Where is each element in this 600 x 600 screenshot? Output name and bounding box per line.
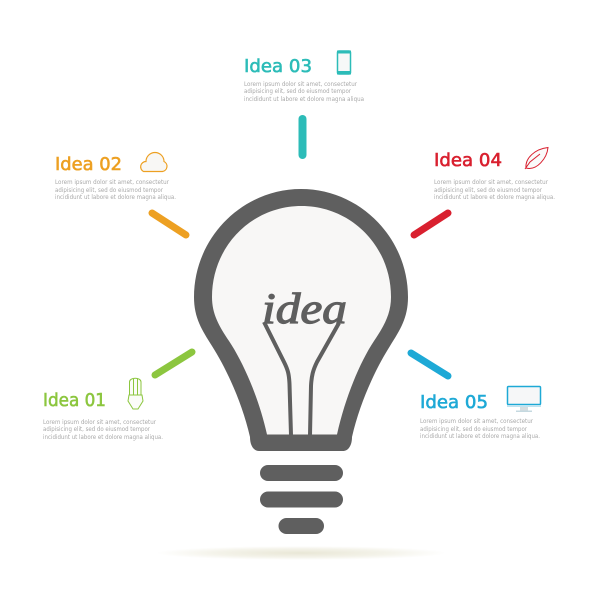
bulb glass outline <box>194 189 408 451</box>
ray: idea 05 <box>411 353 448 376</box>
heading: Idea 01 <box>43 390 106 411</box>
icon: light bulb <box>194 189 408 534</box>
icon: smartphone <box>337 50 351 74</box>
screw base bar 2 <box>260 492 343 508</box>
body text: adipisicing elit, sed do eiusmod tempor <box>43 426 150 433</box>
block: idea 03 <box>244 50 364 103</box>
body text: incididunt ut labore et dolore magna aliqua <box>244 96 364 103</box>
body text: adipisicing elit, sed do eiusmod tempor <box>55 187 163 194</box>
body text <box>244 81 364 103</box>
word: idea: idea <box>262 286 347 333</box>
body text <box>434 179 555 201</box>
bulb glass interior <box>212 206 391 434</box>
ray: idea 02 <box>152 213 186 235</box>
ground shadow <box>156 546 446 560</box>
icon: cloud <box>141 152 167 172</box>
screw base bar 3 <box>278 518 324 534</box>
body text: incididunt ut labore et dolore magna aliqua. <box>43 434 163 441</box>
body text <box>420 418 540 440</box>
body text <box>43 419 163 441</box>
body text: Lorem ipsum dolor sit amet, consectetur <box>434 179 548 186</box>
heading: Idea 04 <box>434 150 502 171</box>
block: idea 05 <box>420 386 541 440</box>
body text: Lorem ipsum dolor sit amet, consectetur <box>420 418 533 425</box>
ray: idea 01 <box>155 352 192 375</box>
body text: incididunt ut labore et dolore magna aliqua. <box>420 433 540 440</box>
heading: Idea 05 <box>420 392 488 413</box>
icon: cfl bulb <box>128 378 143 409</box>
body text: adipisicing elit, sed do eiusmod tempor <box>434 187 542 194</box>
body text: Lorem ipsum dolor sit amet, consectetur <box>55 179 169 186</box>
filament <box>264 322 339 435</box>
body text: incididunt ut labore et dolore magna aliqua. <box>434 194 555 201</box>
block: idea 02 <box>55 152 176 201</box>
body text: Lorem ipsum dolor sit amet, consectetur <box>244 81 357 88</box>
heading: Idea 03 <box>244 56 312 77</box>
ray: idea 03 <box>298 119 306 155</box>
body text: adipisicing elit, sed do eiusmod tempor <box>244 88 351 95</box>
icon: monitor <box>507 386 541 412</box>
block: idea 01 <box>43 378 163 441</box>
body text: adipisicing elit, sed do eiusmod tempor <box>420 426 527 433</box>
heading: Idea 02 <box>55 154 122 175</box>
body text: incididunt ut labore et dolore magna aliqua. <box>55 194 176 201</box>
body text: Lorem ipsum dolor sit amet, consectetur <box>43 419 156 426</box>
body text <box>55 179 176 201</box>
block: idea 04 <box>434 148 555 201</box>
screw base bar 1 <box>260 465 343 481</box>
icon: leaf <box>525 148 548 169</box>
ray: idea 04 <box>414 213 448 235</box>
